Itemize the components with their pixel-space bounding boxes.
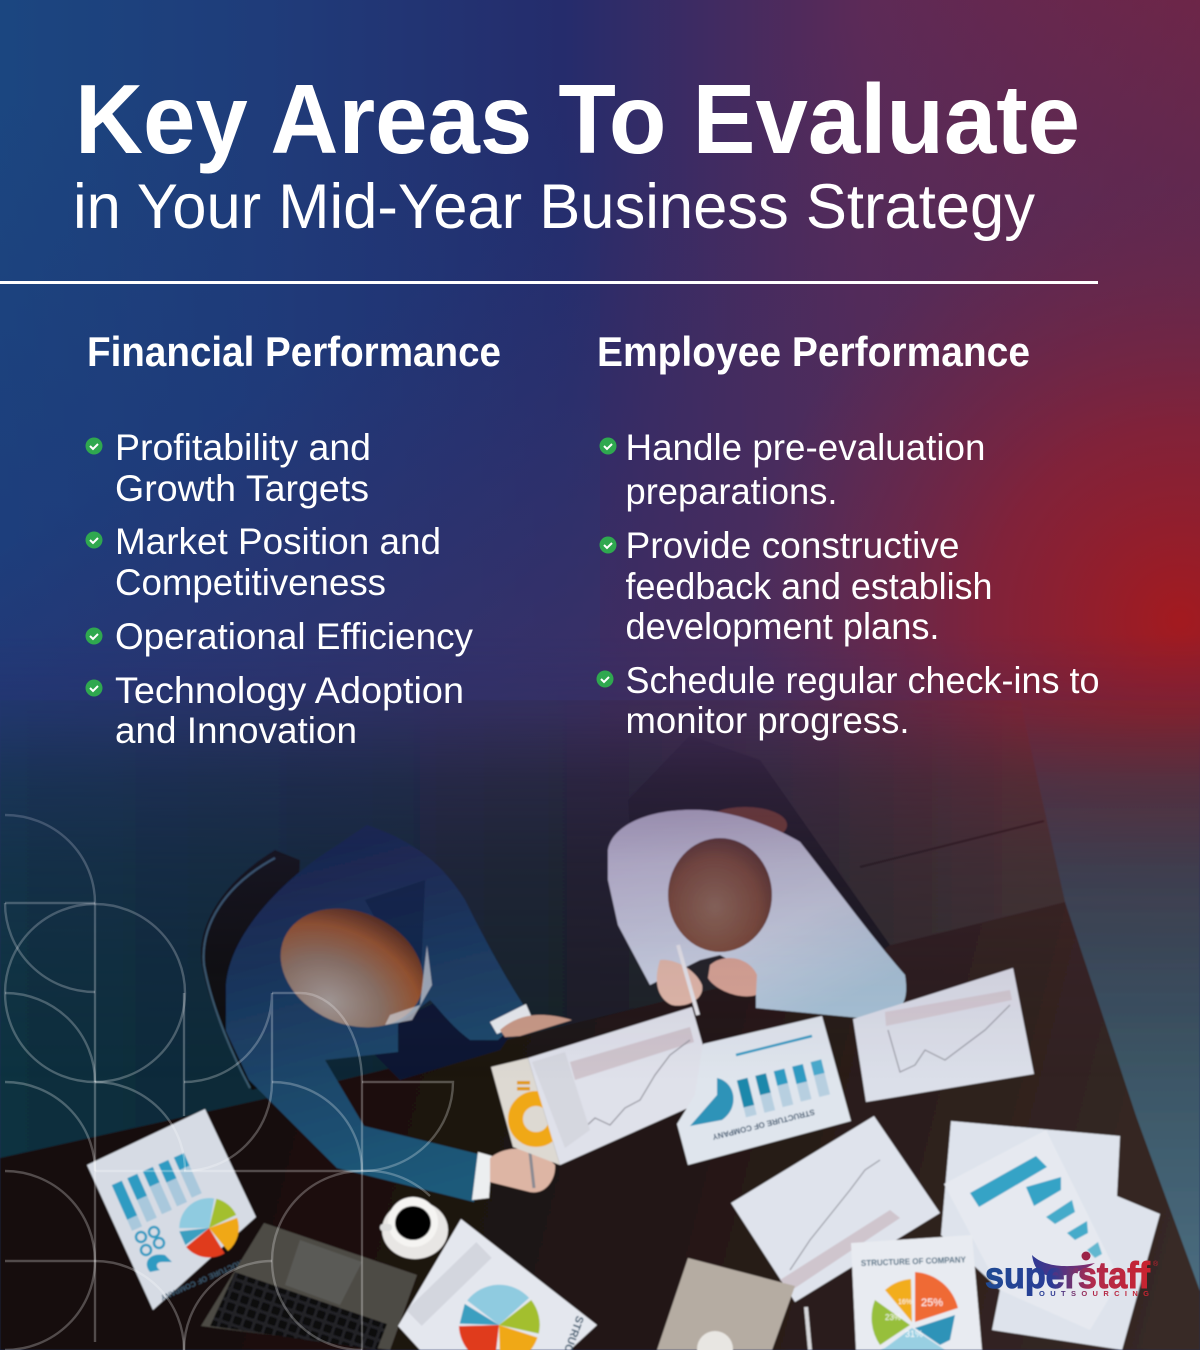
list item: profitability: Growth Targets — [115, 467, 369, 509]
pen — [806, 1307, 810, 1350]
list item: feedback — [600, 524, 992, 647]
paper: structure bars — [677, 1016, 851, 1165]
list item: market position: Competitiveness — [115, 561, 386, 603]
subtitle: in Your Mid-Year Business Strategy — [73, 172, 1035, 242]
man's chair — [201, 850, 300, 1090]
woman's chair — [628, 735, 890, 965]
paper: structure of company: 16% — [898, 1299, 912, 1306]
panel: employee performance — [596, 328, 1100, 741]
list item: pre-evaluation: Handle pre-evaluation — [626, 426, 986, 468]
heading: financial performance: Financial Performance — [87, 328, 501, 375]
decorative line pattern — [5, 815, 453, 1350]
woman — [608, 807, 906, 1018]
paper: structure bars: STRUCTURE OF COMPANY — [711, 1107, 816, 1142]
list item: technology adoption: Technology Adoption — [115, 669, 464, 711]
list item: profitability — [86, 426, 371, 509]
paper: structure of company: 31% — [905, 1329, 923, 1339]
list item: market position — [86, 520, 441, 603]
paper: line chart right — [853, 968, 1034, 1102]
list item: profitability: Profitability and — [115, 426, 371, 468]
panel: financial performance — [86, 328, 501, 751]
logo: superstaff outsourcing: ® — [1153, 1260, 1159, 1268]
floor — [0, 700, 1200, 1350]
logo: superstaff outsourcing: superstaff — [985, 1255, 1151, 1296]
list item: check-ins — [596, 659, 1100, 741]
list item: technology adoption — [86, 669, 464, 751]
list item: operational efficiency: Operational Efficiency — [115, 615, 473, 657]
divider — [0, 281, 1098, 284]
laptop left — [201, 1223, 417, 1350]
floor seam — [860, 821, 1044, 867]
paper: structure of company: 25% — [921, 1297, 943, 1309]
list item: feedback: development plans. — [626, 605, 940, 647]
paper: bar chart left — [87, 1109, 256, 1310]
table — [0, 902, 1200, 1350]
laptop silver — [657, 1258, 795, 1350]
list item: market position: Market Position and — [115, 520, 441, 562]
paper: line chart middle — [731, 1116, 940, 1302]
paper: line chart centre — [528, 1007, 717, 1165]
list item: technology adoption: and Innovation — [115, 709, 357, 751]
logo: superstaff outsourcing: OUTSOURCING — [1039, 1289, 1149, 1298]
list item: feedback: Provide constructive — [626, 524, 960, 566]
paper: structure of company: 23% — [885, 1313, 901, 1322]
paper stack right — [941, 1121, 1160, 1350]
list item: check-ins: Schedule regular check-ins to — [626, 659, 1100, 701]
paper: pie chart bottom — [398, 1219, 597, 1350]
color gradient overlay — [0, 0, 1200, 1026]
list item: feedback: feedback and establish — [626, 565, 992, 607]
list item: check-ins: monitor progress. — [626, 699, 910, 741]
paper: orange donut — [491, 1058, 560, 1165]
paper: bar chart left: STRUCTURE OF COMPANY — [159, 1254, 253, 1302]
photo: office desk scene — [0, 700, 1200, 1350]
paper: structure of company — [851, 1235, 982, 1350]
title: Key Areas To Evaluate — [75, 64, 1080, 174]
man — [226, 825, 572, 1202]
heading: employee performance: Employee Performance — [597, 328, 1030, 375]
list item: pre-evaluation: preparations. — [626, 470, 838, 512]
coffee cup — [380, 1197, 448, 1259]
paper: structure of company: STRUCTURE OF COMPANY — [861, 1254, 966, 1268]
list item: pre-evaluation — [600, 426, 986, 512]
wall band right — [1020, 700, 1200, 1300]
